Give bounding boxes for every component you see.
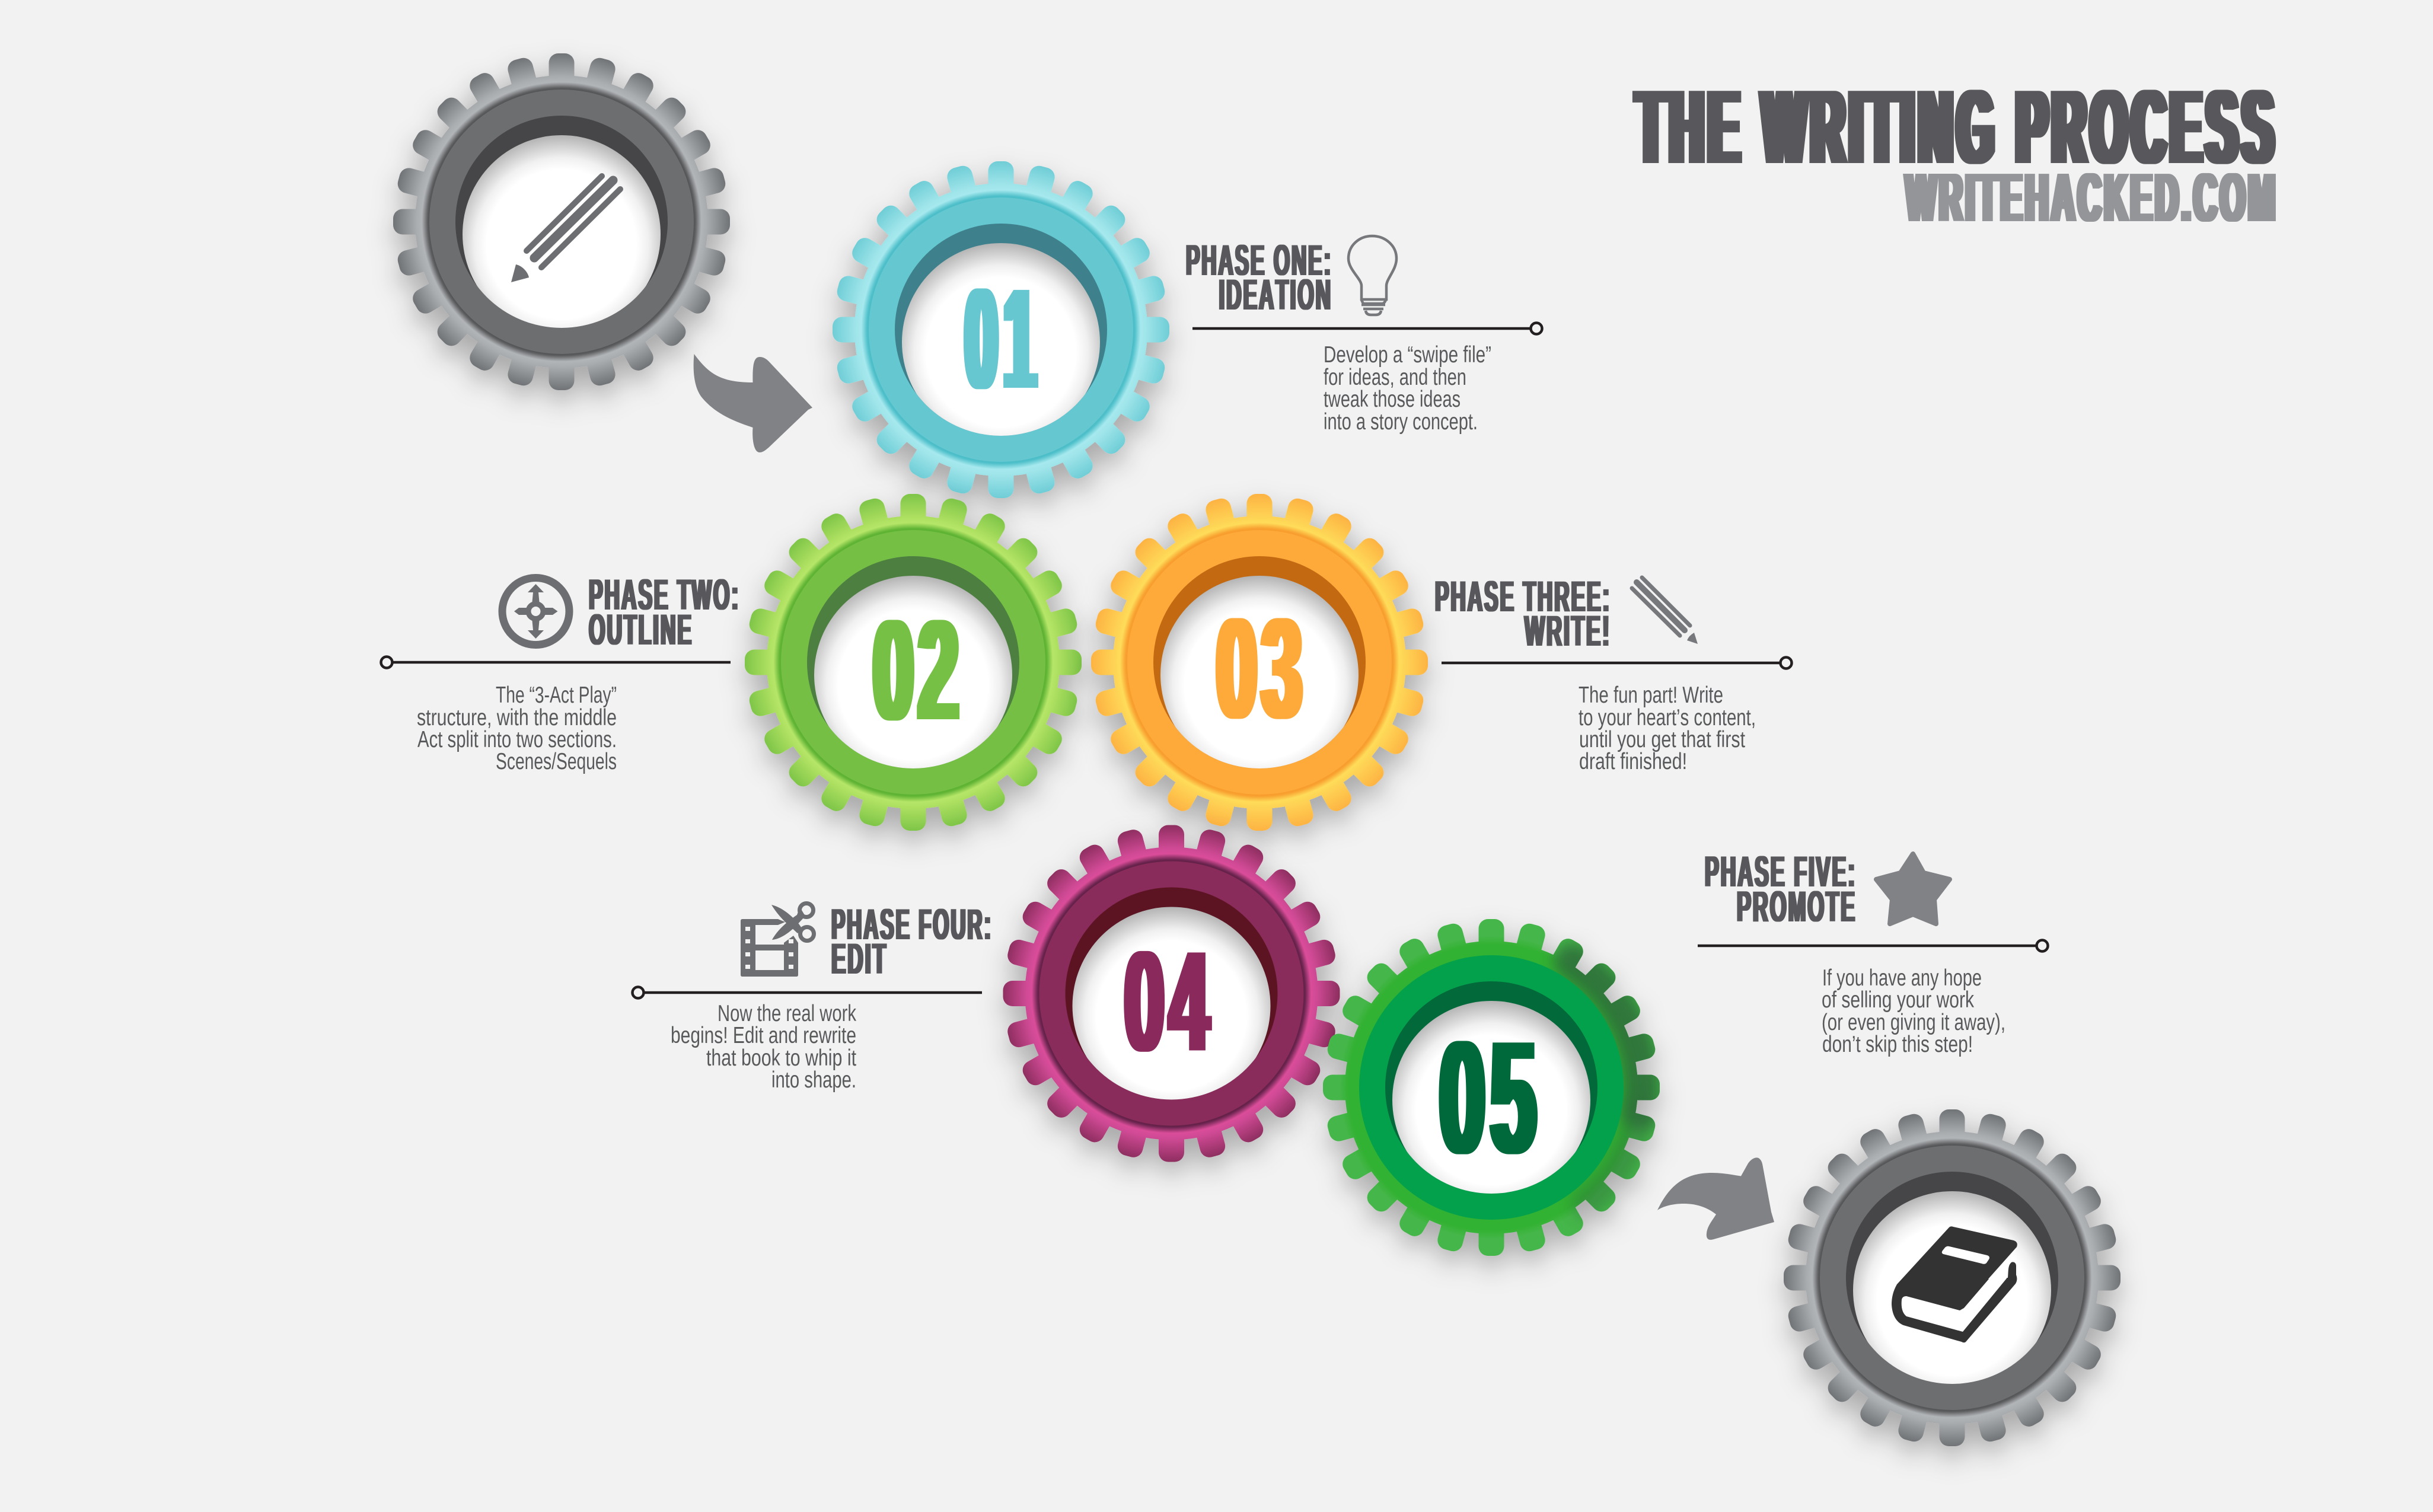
- gear ring: [869, 197, 1133, 462]
- body text: Scenes/Sequels: [496, 749, 617, 774]
- heading: [831, 901, 993, 983]
- body text: The “3-Act Play”: [496, 682, 617, 708]
- heading: OUTLINE: [589, 606, 693, 654]
- gear ring: [1820, 1146, 2084, 1410]
- gear teeth: [1784, 1109, 2120, 1446]
- white centre: [1072, 907, 1270, 1105]
- gear teeth: [393, 53, 730, 390]
- number 02: 02: [873, 591, 964, 749]
- body text: [417, 682, 617, 774]
- panel: phase one: PHASE ONE:: [1186, 237, 1332, 285]
- infographic canvas: PHASE TWO:: [589, 571, 740, 619]
- icon: book: [1892, 1226, 2017, 1342]
- icon: pencil: [511, 176, 620, 282]
- body text: to your heart’s content,: [1579, 705, 1756, 731]
- heading: [1435, 573, 1611, 655]
- arrow: phase five to book: [1657, 1157, 1774, 1240]
- panel: phase three: [1435, 573, 1792, 774]
- gear teeth: [1323, 919, 1660, 1256]
- gear ring: [1359, 955, 1624, 1220]
- gear: 03: [1091, 494, 1428, 831]
- body text: Now the real work: [718, 1001, 856, 1026]
- body text: draft finished!: [1579, 749, 1687, 774]
- heading: EDIT: [831, 935, 888, 983]
- body text: of selling your work: [1822, 987, 1974, 1013]
- infographic canvas: PHASE FOUR:: [831, 901, 993, 949]
- gear: end, book: [1784, 1109, 2120, 1446]
- infographic canvas: [380, 53, 2276, 1469]
- icon: compass: [502, 578, 569, 645]
- white centre: [463, 135, 661, 333]
- connector line: [1192, 323, 1542, 334]
- gear shadow crescent: [1573, 962, 1641, 1203]
- gear: 04: 04: [1124, 921, 1214, 1080]
- connector line: [1698, 940, 2048, 951]
- icon: film and scissors: [741, 904, 814, 977]
- dark hole: [1065, 887, 1277, 1099]
- white centre: [1160, 576, 1359, 774]
- panel: phase five: [1698, 848, 2048, 1057]
- dark hole: [1153, 556, 1366, 768]
- body text: [1822, 965, 2005, 1057]
- icon: star: [1876, 854, 1950, 924]
- body text: into a story concept.: [1324, 409, 1478, 435]
- number 05: 05: [1440, 1009, 1542, 1187]
- gear: 05: [1323, 919, 1660, 1256]
- gear: 01: [833, 161, 1169, 498]
- dark hole: [1846, 1172, 2058, 1384]
- dark hole: [455, 116, 668, 328]
- heading: [1186, 237, 1332, 319]
- body text: (or even giving it away),: [1822, 1010, 2005, 1035]
- gear: 04: [1003, 825, 1340, 1162]
- white centre: [902, 243, 1100, 441]
- connector line: [1442, 657, 1792, 669]
- gear teeth: [1003, 825, 1340, 1162]
- dark hole: [1385, 981, 1597, 1194]
- body text: until you get that first: [1579, 727, 1745, 752]
- white centre: [1392, 1001, 1590, 1199]
- dark hole: [895, 224, 1107, 436]
- connector line: [381, 657, 731, 668]
- icon: light bulb: [1348, 236, 1396, 315]
- gear ring: [1039, 861, 1303, 1125]
- panel: phase five: PHASE FIVE:: [1705, 848, 1857, 896]
- body text: tweak those ideas: [1324, 387, 1461, 412]
- body text: Develop a “swipe file”: [1324, 342, 1491, 368]
- body text: [1324, 342, 1491, 435]
- number 03: 03: [1217, 589, 1307, 748]
- gear teeth: [1091, 494, 1428, 831]
- body text: [1579, 682, 1756, 774]
- gear: start, pencil: [393, 53, 730, 390]
- panel: phase two: [381, 571, 740, 774]
- gear teeth: [745, 494, 1082, 831]
- panel: phase one: IDEATION: [1219, 271, 1332, 319]
- body text: begins! Edit and rewrite: [671, 1023, 856, 1048]
- body text: If you have any hope: [1822, 965, 1982, 991]
- panel: phase one: [1186, 236, 1542, 435]
- gear teeth: [833, 161, 1169, 498]
- body text: for ideas, and then: [1324, 365, 1466, 390]
- body text: that book to whip it: [706, 1045, 856, 1071]
- connector line: [632, 987, 982, 999]
- gear: 02: [745, 494, 1082, 831]
- body text: into shape.: [771, 1067, 856, 1093]
- body text: The fun part! Write: [1579, 682, 1723, 708]
- panel: phase four: [632, 901, 993, 1093]
- gear ring: [429, 90, 694, 354]
- body text: structure, with the middle: [417, 705, 617, 731]
- heading: [589, 571, 740, 654]
- arrow: start to phase one: [694, 354, 812, 452]
- white centre: [814, 576, 1012, 774]
- body text: [671, 1001, 856, 1093]
- white centre: [1853, 1191, 2051, 1389]
- gear: 01: 01: [965, 259, 1042, 418]
- title: [1637, 68, 2278, 236]
- icon: pencil: [1632, 578, 1698, 644]
- body text: Act split into two sections.: [417, 727, 617, 752]
- panel: phase three: PHASE THREE:: [1435, 573, 1611, 621]
- gear ring: [1127, 530, 1392, 795]
- dark hole: [807, 556, 1019, 768]
- heading: [1705, 848, 1857, 931]
- body text: don’t skip this step!: [1822, 1032, 1973, 1057]
- panel: phase three: WRITE!: [1525, 607, 1611, 655]
- panel: phase five: PROMOTE: [1737, 883, 1857, 931]
- gear ring: [781, 530, 1045, 795]
